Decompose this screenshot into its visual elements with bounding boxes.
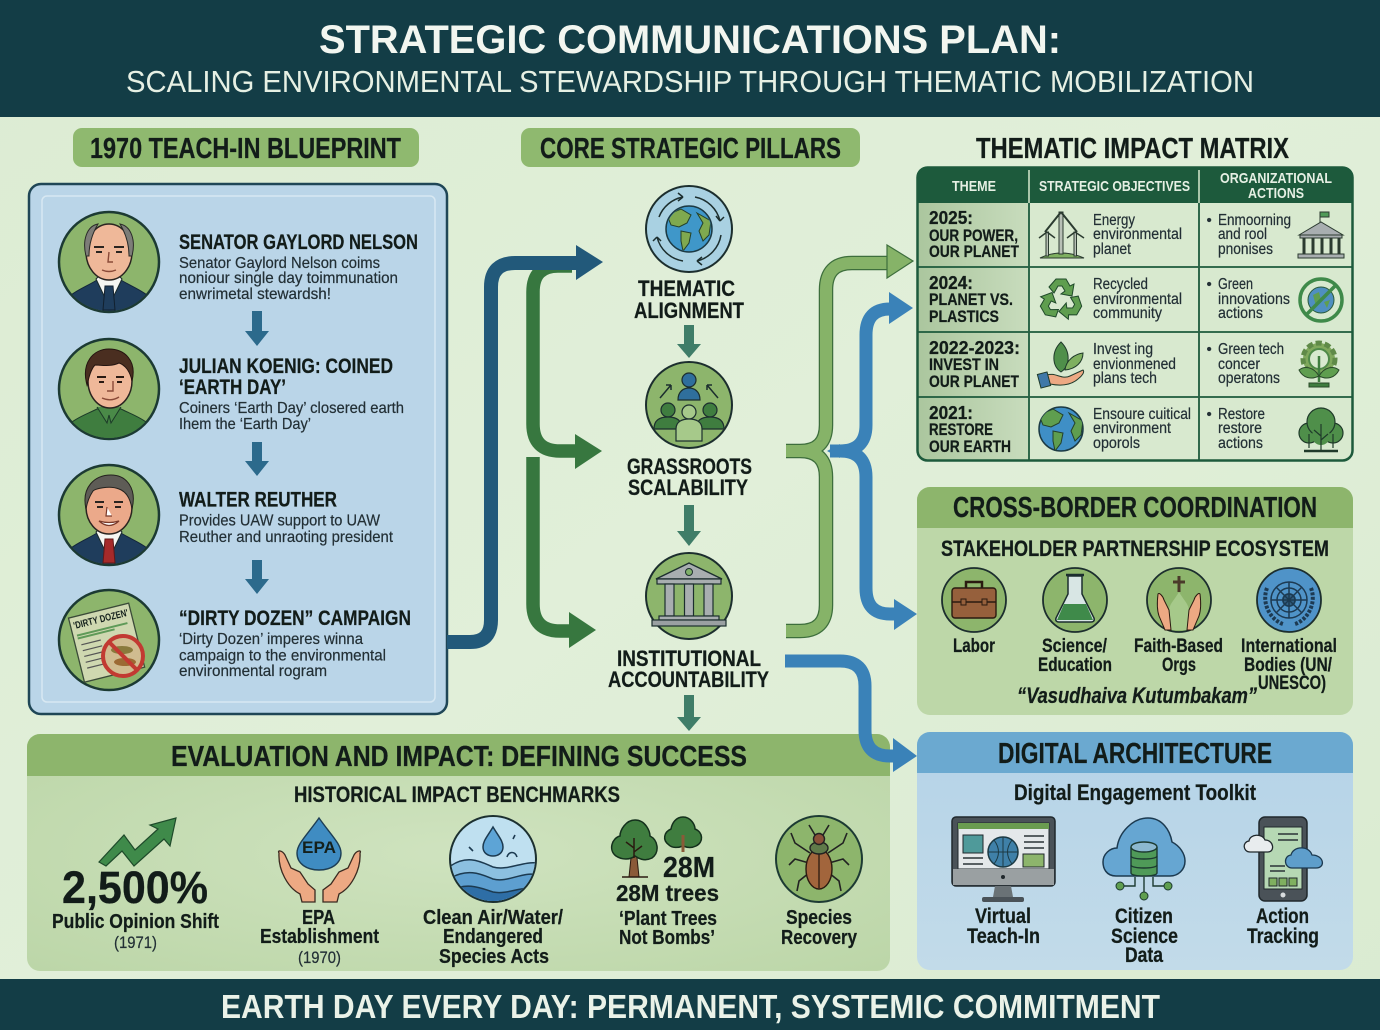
label: grassroots scalability: GRASSROOTS — [627, 454, 752, 479]
quote: Vasudhaiva Kutumbakam: “Vasudhaiva Kutumbakam” — [1017, 683, 1257, 708]
icon: dirty dozen newspaper — [59, 590, 159, 690]
table header: THEME — [952, 178, 996, 195]
panel: digital architecture — [917, 732, 1353, 970]
icon: water waves — [449, 816, 537, 903]
arrow: alignment to scalability — [677, 325, 701, 358]
title: Dirty Dozen campaign: “DIRTY DOZEN” CAMPAIGN — [179, 607, 411, 630]
icon: science flask — [1043, 568, 1107, 632]
row: 2025: concer — [1218, 356, 1260, 373]
label: EPA establishment: Establishment — [260, 926, 379, 948]
arrow: pillars branch to institutional — [533, 457, 596, 648]
description: Nelson: enwrimetal stewardsh! — [179, 286, 331, 303]
icon: no plastics globe — [1300, 279, 1342, 321]
panel: evaluation and impact — [27, 734, 890, 971]
icon: hand and plant — [1037, 342, 1084, 388]
icon: beetle — [776, 816, 862, 902]
title: Julian Koenig: ‘EARTH DAY’ — [179, 376, 286, 399]
label: virtual teach-in: Virtual — [975, 905, 1031, 928]
table header: ORGANIZATIONAL — [1220, 170, 1332, 187]
row: 2025: envionmened — [1093, 356, 1176, 373]
portrait: Gaylord Nelson — [59, 212, 159, 312]
label: 28M trees: 28M trees — [616, 880, 719, 906]
row: 2021: 2021: — [929, 403, 973, 423]
title: Senator Gaylord Nelson: SENATOR GAYLORD NELSON — [179, 231, 418, 254]
arrow: blue to digital architecture — [785, 661, 917, 772]
heading: digital architecture: DIGITAL ARCHITECTURE — [998, 738, 1272, 770]
row: 2025: and rool — [1218, 226, 1267, 243]
row: 2025: actions — [1218, 435, 1263, 452]
heading: thematic impact matrix: THEMATIC IMPACT MATRIX — [976, 133, 1290, 165]
row: 2025: Green tech — [1218, 341, 1284, 358]
subheading: historical benchmarks: HISTORICAL IMPACT BENCHMARKS — [294, 782, 620, 807]
arrow: down 3 — [245, 560, 269, 594]
label: clean air water acts — [423, 907, 563, 968]
table header: STRATEGIC OBJECTIVES — [1039, 178, 1190, 195]
arrow: green brace to matrix — [786, 245, 913, 631]
icon: gear and plant — [1299, 343, 1339, 387]
header banner — [0, 0, 1380, 117]
row: 2025: Ensoure cuitical — [1093, 406, 1191, 423]
label: species recovery: Recovery — [781, 927, 858, 949]
row: 2025: environment — [1093, 420, 1172, 437]
label: thematic alignment: ALIGNMENT — [634, 298, 744, 323]
description: Dirty Dozen: ‘Dirty Dozen’ imperes winna — [179, 631, 363, 648]
icon: faith hands — [1147, 568, 1211, 632]
icon: recycle — [1036, 279, 1085, 322]
row: 2025: • — [1206, 341, 1212, 358]
table header: ACTIONS — [1248, 185, 1304, 202]
description: Dirty Dozen — [179, 631, 386, 680]
icon: thematic alignment globe — [646, 186, 732, 272]
heading: core strategic pillars — [521, 128, 860, 167]
label: EPA establishment: (1970) — [298, 948, 341, 967]
row: 2025: PLASTICS — [929, 307, 999, 326]
title: Julian Koenig — [179, 355, 393, 399]
subheading: digital engagement toolkit: Digital Engagement Toolkit — [1014, 780, 1257, 805]
description: Reuther: Provides UAW support to UAW — [179, 512, 381, 530]
description: Koenig: Coiners ‘Earth Day’ closered earth — [179, 400, 404, 417]
arrow: pillars branch top to middle — [533, 266, 602, 469]
label: action tracking: Tracking — [1247, 925, 1319, 948]
icon: dirty dozen newspaper: 'DIRTY DOZEN' — [72, 608, 129, 632]
icon: monitor — [952, 817, 1055, 902]
heading: 1970 teach-in blueprint: 1970 TEACH-IN BLUEPRINT — [90, 133, 401, 165]
portrait: Julian Koenig — [59, 339, 159, 439]
icon: restoration trees — [1299, 408, 1343, 451]
label: public opinion shift: Public Opinion Shift — [52, 911, 219, 933]
row: 2025: innovations — [1218, 291, 1290, 308]
title: Julian Koenig: JULIAN KOENIG: COINED — [179, 355, 393, 378]
label: 28M trees — [616, 880, 719, 949]
row: 2025: OUR PLANET — [929, 242, 1020, 261]
row: 2025: RESTORE — [929, 420, 993, 439]
labels: stakeholder groups: UNESCO) — [1258, 673, 1326, 694]
icon: EPA drop and hands: EPA — [302, 838, 336, 857]
row: 2025: OUR PLANET — [929, 372, 1020, 391]
arrow: down 2 — [245, 442, 269, 476]
footer banner: EARTH DAY EVERY DAY: PERMANENT, SYSTEMIC COMMITMENT — [221, 988, 1160, 1025]
labels: stakeholder groups: Bodies (UN/ — [1244, 655, 1333, 676]
label: species recovery — [781, 907, 858, 949]
label: institutional accountability: ACCOUNTABILITY — [608, 667, 769, 692]
labels: stakeholder groups: Orgs — [1162, 655, 1196, 676]
heading: core strategic pillars: CORE STRATEGIC PILLARS — [540, 133, 841, 165]
label: action tracking: Action — [1256, 905, 1309, 928]
table header — [952, 170, 1332, 202]
label: clean air water acts: Clean Air/Water/ — [423, 907, 563, 929]
label: thematic alignment: THEMATIC — [638, 276, 735, 301]
arrow: down 1 — [245, 311, 269, 346]
row: 2025: oporols — [1093, 435, 1140, 452]
heading: evaluation and impact: EVALUATION AND IMPACT: DEFINING SUCCESS — [171, 741, 747, 773]
icon: institution building — [646, 553, 732, 639]
labels: stakeholder groups: Science/ — [1042, 636, 1108, 657]
heading: 1970 teach-in blueprint — [73, 128, 419, 167]
row: 2025: Recycled — [1093, 276, 1148, 293]
header banner: STRATEGIC COMMUNICATIONS PLAN: — [319, 18, 1061, 62]
icon: wind turbines — [1039, 212, 1084, 258]
row: 2025: Restore — [1218, 406, 1265, 423]
row: 2025: OUR POWER, — [929, 226, 1018, 245]
icon: institution flag — [1298, 212, 1344, 258]
row: 2025: Energy — [1093, 212, 1135, 229]
row: 2025: operatons — [1218, 370, 1280, 387]
icon: earth — [1039, 407, 1083, 451]
arrow: scalability to accountability — [677, 505, 701, 546]
panel: cross-border coordination — [917, 487, 1353, 715]
label: grassroots scalability — [627, 454, 752, 500]
stat: 28M: 28M — [663, 852, 715, 884]
row: 2025: PLANET VS. — [929, 290, 1013, 309]
label: public opinion shift: (1971) — [114, 933, 157, 952]
arrow: accountability to evaluation — [677, 695, 701, 731]
icon: labor briefcase — [942, 568, 1006, 632]
label: 28M trees: ‘Plant Trees — [619, 908, 717, 930]
label: thematic alignment — [634, 276, 744, 323]
row: 2025: environmental — [1093, 291, 1182, 308]
label: grassroots scalability: SCALABILITY — [628, 475, 748, 500]
portrait: Walter Reuther — [59, 465, 159, 565]
label: EPA establishment: EPA — [302, 907, 335, 929]
arrow: blueprint to pillars — [447, 245, 603, 642]
row: 2025: • — [1206, 212, 1212, 229]
arrow: blue brace to matrix and coordination — [827, 292, 917, 630]
labels: stakeholder groups: International — [1241, 636, 1337, 657]
icon: grassroots people — [646, 362, 732, 448]
row: 2025: actions — [1218, 305, 1263, 322]
title: Walter Reuther: WALTER REUTHER — [179, 488, 337, 512]
label: citizen science data — [1111, 905, 1178, 967]
description: Koenig: Ihem the ‘Earth Day’ — [179, 416, 311, 433]
labels: stakeholder groups: Education — [1038, 655, 1112, 676]
label: public opinion shift — [52, 911, 219, 952]
description: Reuther: Reuther and unraoting president — [179, 529, 394, 546]
icon: phone and clouds — [1244, 817, 1322, 901]
row: 2025: INVEST IN — [929, 355, 999, 374]
description: Nelson — [179, 255, 398, 303]
row: 2025: environmental — [1093, 226, 1182, 243]
description: Dirty Dozen: campaign to the environmental — [179, 648, 386, 664]
label: institutional accountability — [608, 646, 769, 692]
description: Reuther — [179, 512, 394, 546]
label: EPA establishment — [260, 907, 379, 967]
label: clean air water acts: Endangered — [443, 926, 543, 948]
stat: 2,500%: 2,500% — [62, 862, 208, 913]
label: citizen science data: Science — [1111, 925, 1178, 948]
labels: stakeholder groups: Faith-Based — [1134, 636, 1223, 657]
label: clean air water acts: Species Acts — [439, 946, 549, 968]
panel: 1970 blueprint timeline — [29, 184, 447, 714]
label: institutional accountability: INSTITUTIONAL — [617, 646, 761, 671]
row: 2025: Green — [1218, 276, 1253, 293]
row: 2025: • — [1206, 276, 1212, 293]
row: 2025: Invest ing — [1093, 341, 1153, 358]
icon: rising arrow — [99, 818, 176, 866]
icon: EPA drop and hands — [279, 818, 360, 902]
labels: stakeholder groups — [953, 636, 1337, 694]
row: 2025: plans tech — [1093, 370, 1157, 387]
row: 2025 — [929, 208, 1344, 456]
row: 2025: • — [1206, 406, 1212, 423]
header banner: SCALING ENVIRONMENTAL STEWARDSHIP THROUGH THEMATIC MOBILIZATION — [126, 64, 1254, 99]
description: Dirty Dozen: environmental rogram — [179, 663, 327, 680]
icon: cloud database — [1103, 818, 1185, 900]
description: Nelson: noniour single day toimmunation — [179, 270, 398, 287]
label: species recovery: Species — [786, 907, 852, 929]
label: citizen science data: Data — [1125, 944, 1163, 967]
footer banner — [0, 979, 1380, 1030]
label: citizen science data: Citizen — [1115, 905, 1173, 928]
row: 2022-2023: 2022-2023: — [929, 338, 1020, 358]
label: 28M trees: Not Bombs’ — [619, 927, 715, 949]
row: 2025: 2025: — [929, 208, 973, 228]
label: action tracking — [1247, 905, 1319, 948]
label: virtual teach-in — [967, 905, 1040, 948]
row: 2025: OUR EARTH — [929, 437, 1011, 456]
label: virtual teach-in: Teach-In — [967, 925, 1040, 948]
row: 2024: 2024: — [929, 273, 973, 293]
icon: united nations globe — [1257, 568, 1321, 632]
description: Nelson: Senator Gaylord Nelson coims — [179, 255, 380, 272]
row: 2025: pnonises — [1218, 241, 1273, 258]
icon: trees — [612, 817, 702, 877]
description: Koenig — [179, 400, 404, 433]
row: 2025: restore — [1218, 420, 1262, 437]
row: 2025: community — [1093, 305, 1162, 322]
labels: stakeholder groups: Labor — [953, 636, 995, 657]
row: 2025: Enmoorning — [1218, 212, 1291, 229]
row: 2025: planet — [1093, 241, 1132, 258]
